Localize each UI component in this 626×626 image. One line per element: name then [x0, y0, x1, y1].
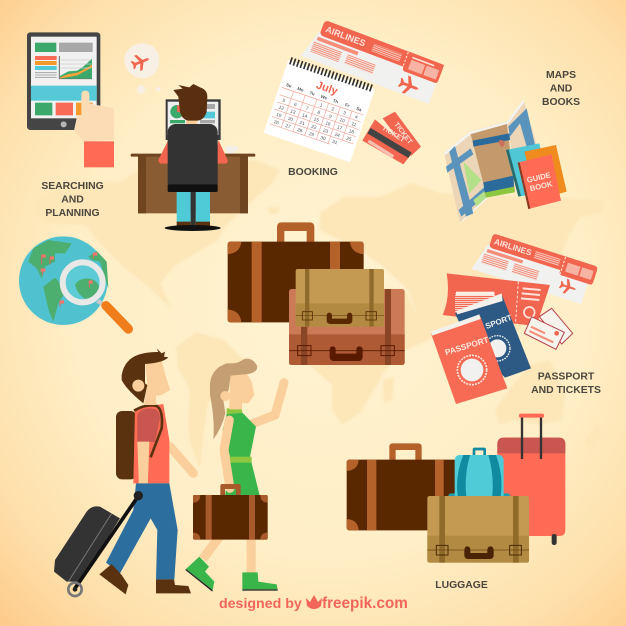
- woman: [185, 359, 284, 592]
- calendar: 23: [322, 128, 329, 134]
- guide books: GUIDE: [526, 170, 552, 185]
- calendar: 17: [336, 124, 343, 131]
- label: booking: BOOKING: [288, 167, 338, 178]
- airline ticket: [471, 230, 598, 306]
- panel: passport and tickets: [431, 230, 598, 404]
- calendar: Mo: [297, 86, 305, 93]
- calendar: 25: [346, 136, 353, 142]
- calendar: 4: [354, 114, 359, 120]
- map: [444, 99, 538, 223]
- brown suitcase: [347, 443, 457, 530]
- label: passport and tickets: [531, 372, 601, 396]
- calendar: 14: [301, 112, 308, 119]
- small boarding cards: [524, 308, 573, 349]
- guide books: [506, 143, 567, 209]
- tan suitcase: [296, 269, 384, 327]
- calendar: 16: [325, 120, 332, 127]
- calendar: We: [320, 94, 328, 101]
- label: passport and tickets: AND TICKETS: [531, 385, 601, 396]
- label: searching and planning: AND: [61, 194, 84, 206]
- teal backpack: [448, 448, 510, 513]
- central suitcases: [228, 222, 405, 365]
- calendar: 8: [317, 110, 321, 115]
- panel: booking and maps: [264, 16, 567, 223]
- icon: freepik logo: [306, 595, 322, 609]
- icon: plane thought bubble: [124, 43, 161, 94]
- label: searching and planning: PLANNING: [45, 208, 100, 219]
- calendar: 7: [305, 106, 310, 111]
- large brown suitcase: [228, 222, 364, 322]
- calendar: 12: [278, 105, 285, 111]
- label: maps and books: MAPS: [546, 70, 576, 81]
- calendar: 9: [328, 114, 333, 119]
- calendar: 13: [290, 109, 297, 115]
- airline ticket: [301, 16, 444, 104]
- small tickets: TICKET: [381, 125, 406, 144]
- calendar: 10: [339, 117, 346, 124]
- icon: pointing hand: [74, 91, 114, 167]
- calendar: 27: [285, 123, 292, 130]
- attribution: designed by: [219, 596, 302, 612]
- calendar: July: [315, 79, 340, 98]
- attribution: freepik.com: [322, 595, 408, 612]
- calendar: 3: [343, 110, 347, 116]
- calendar: 6: [293, 102, 298, 107]
- blue passport: SPORT: [484, 313, 513, 331]
- calendar: Th: [332, 98, 339, 104]
- calendar: 24: [334, 132, 341, 138]
- label: maps and books: AND: [550, 84, 573, 94]
- calendar: 18: [348, 128, 355, 135]
- attribution: [219, 595, 408, 612]
- rust suitcase: [289, 289, 405, 365]
- world map: [34, 160, 604, 470]
- travellers: [54, 348, 284, 596]
- man: [54, 348, 193, 596]
- label: maps and books: [542, 70, 580, 108]
- calendar: 19: [276, 112, 282, 118]
- calendar: Sa: [356, 106, 363, 112]
- label: searching and planning: SEARCHING: [41, 181, 104, 192]
- small tickets: [362, 112, 421, 164]
- coral trolley case: [497, 414, 565, 545]
- tan suitcase: [427, 496, 529, 563]
- panel: searching and planning: [27, 32, 255, 231]
- label: maps and books: BOOKS: [542, 97, 580, 108]
- calendar: 11: [351, 121, 357, 128]
- panel: luggage: [347, 414, 565, 563]
- calendar: 29: [308, 131, 315, 137]
- label: passport and tickets: PASSPORT: [538, 372, 595, 382]
- red passport: [431, 314, 507, 404]
- calendar: 15: [313, 116, 320, 123]
- calendar: 21: [299, 120, 306, 126]
- calendar: Tu: [309, 90, 316, 97]
- calendar: 2: [331, 106, 335, 112]
- calendar: 31: [332, 139, 338, 145]
- red ticket folder: [443, 273, 550, 325]
- calendar: 20: [287, 116, 294, 122]
- label: luggage: LUGGAGE: [435, 580, 488, 591]
- calendar: 1: [319, 102, 324, 108]
- man at desk: [131, 84, 255, 231]
- label: searching and planning: [41, 181, 104, 219]
- guide books: BOOK: [529, 179, 554, 193]
- calendar: [264, 60, 375, 162]
- calendar: 22: [311, 124, 318, 130]
- icon: globe with magnifying glass: [19, 236, 128, 329]
- tablet: [27, 32, 100, 130]
- airline ticket: AIRLINES: [324, 24, 367, 48]
- calendar: 5: [282, 98, 286, 103]
- red passport: PASSPORT: [444, 334, 490, 357]
- airline ticket: AIRLINES: [493, 236, 533, 258]
- calendar: 30: [320, 135, 327, 141]
- calendar: 26: [273, 119, 280, 126]
- calendar: Fr: [344, 102, 350, 108]
- small tickets: TICKET: [392, 121, 414, 146]
- calendar: Su: [285, 82, 293, 89]
- calendar: 28: [297, 127, 303, 134]
- blue passport: [455, 293, 531, 378]
